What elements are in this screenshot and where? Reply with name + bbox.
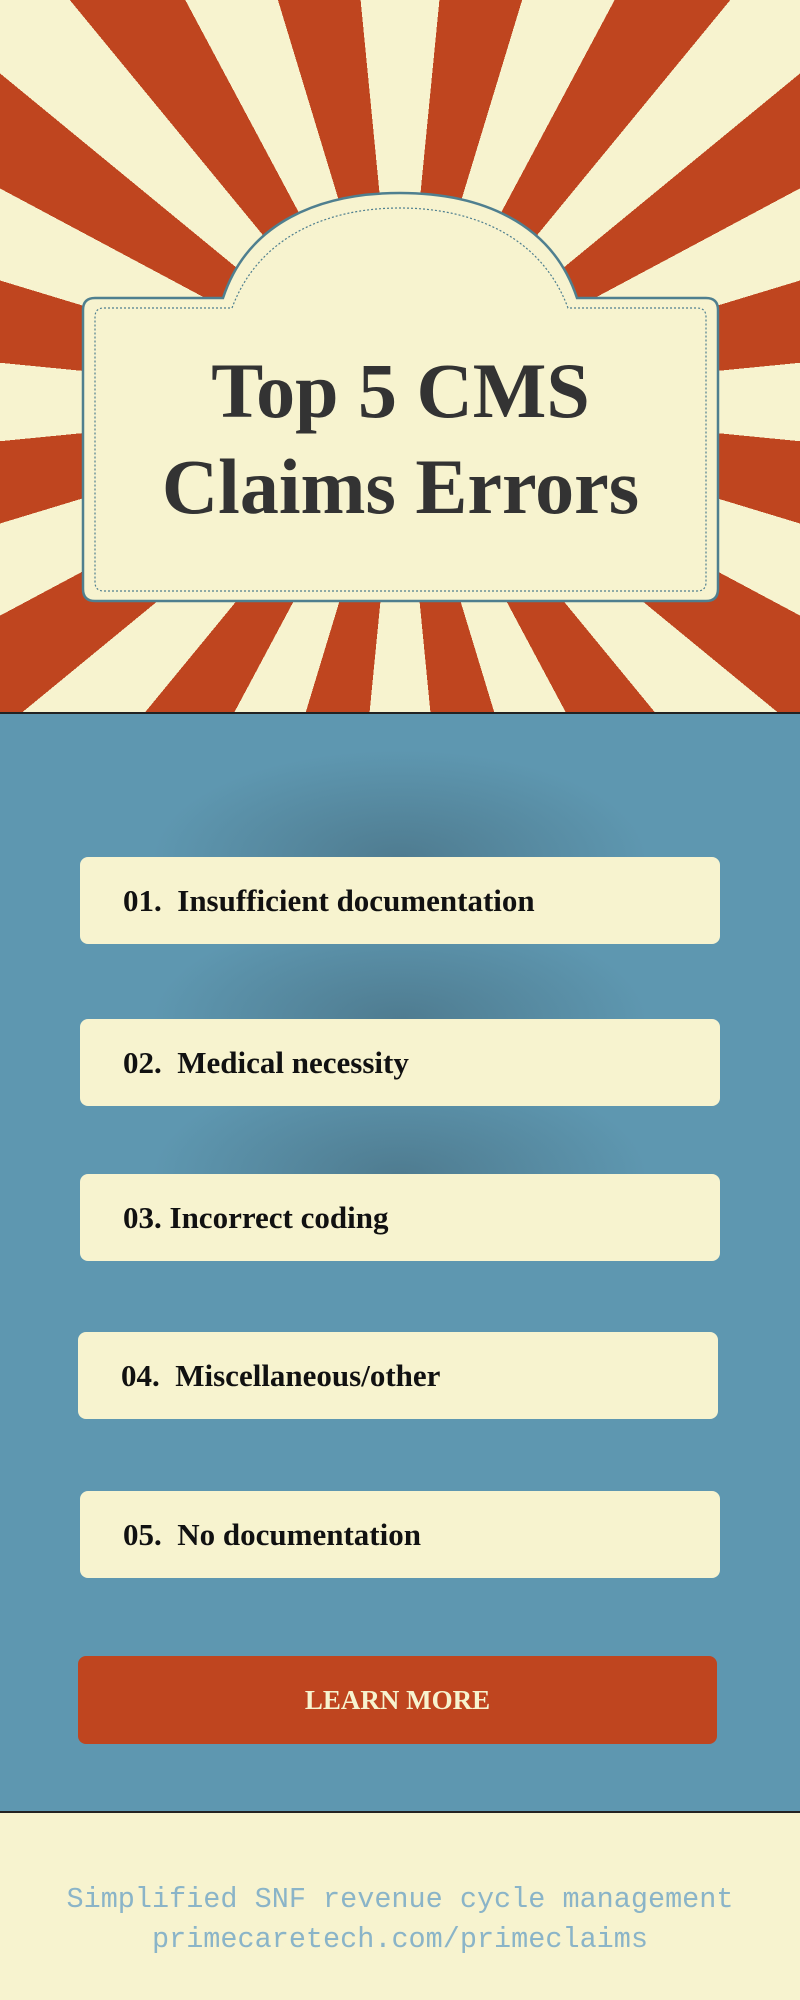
item 3: 03. Incorrect coding [123,1200,388,1235]
item 1: 01. Insufficient documentation [123,883,535,918]
item 5 [80,1491,720,1578]
item 3 [80,1174,720,1261]
item 4 [78,1332,718,1419]
item 2 [80,1019,720,1106]
button: learn more [78,1656,717,1744]
footer text: primecaretech.com/primeclaims [152,1923,648,1956]
button: learn more: LEARN MORE [305,1685,490,1715]
item 1 [80,857,720,944]
title text: Top 5 CMS [211,347,590,434]
item 4: 04. Miscellaneous/other [121,1358,440,1393]
title sign [82,192,720,602]
sunburst header [0,0,800,712]
item 5: 05. No documentation [123,1517,421,1552]
footer text: Simplified SNF revenue cycle management [66,1883,734,1916]
item 2: 02. Medical necessity [123,1045,409,1080]
blue panel: errors list [0,712,800,1813]
title text: Claims Errors [162,443,639,530]
footer text [66,1883,734,1956]
title text [162,347,639,530]
